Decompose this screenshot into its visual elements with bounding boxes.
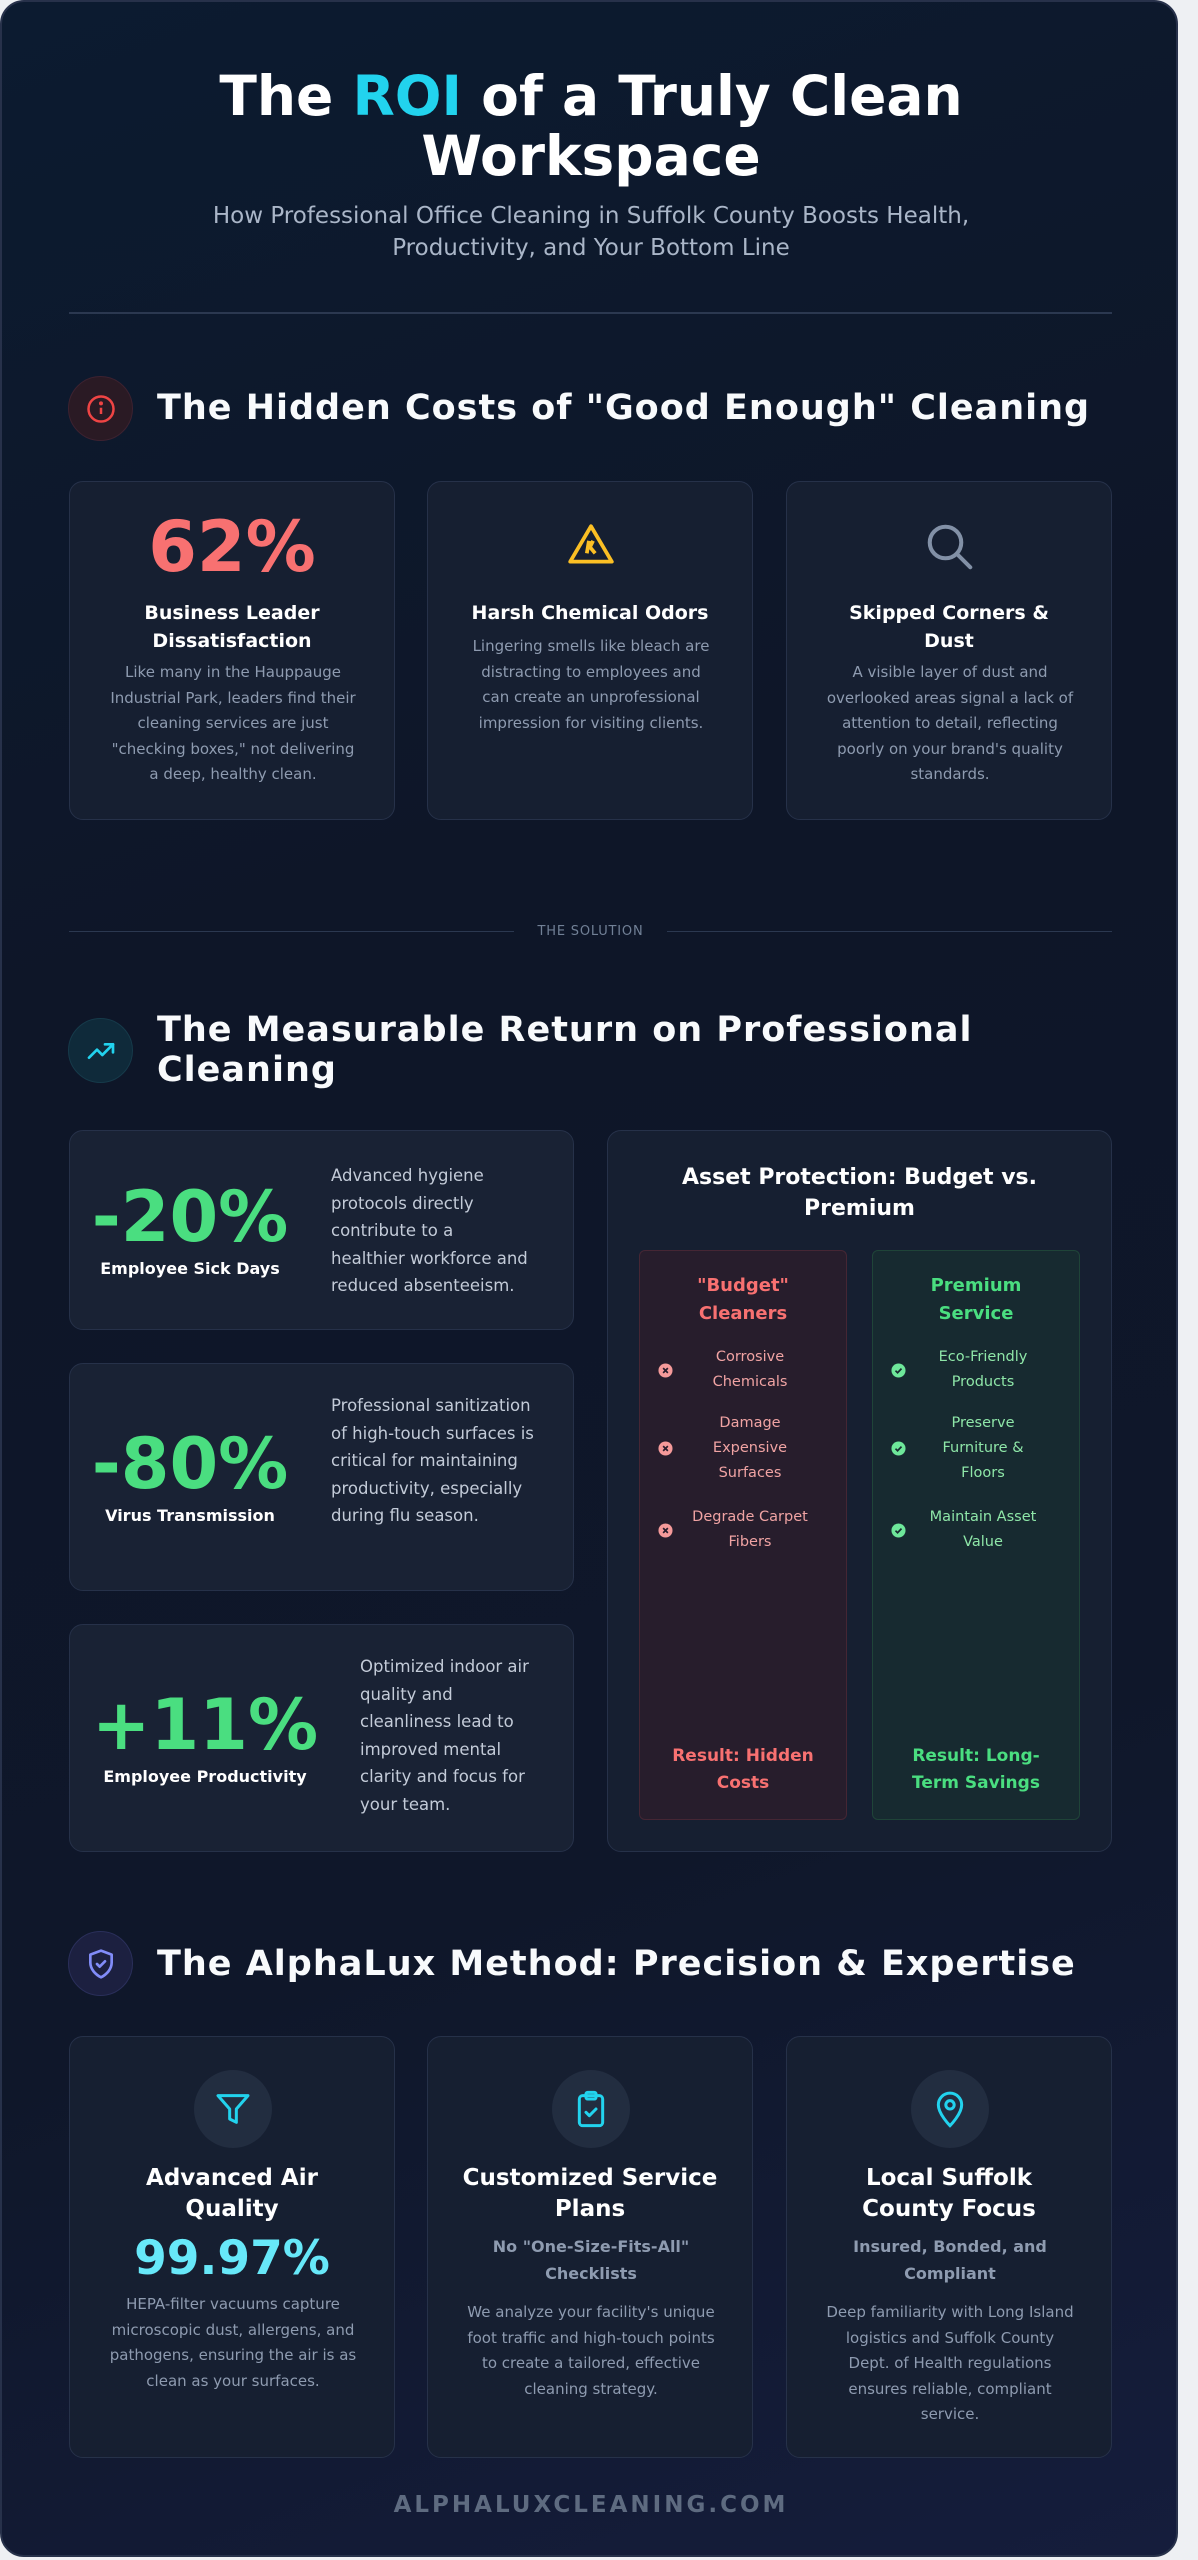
card title: Plans: [555, 2196, 625, 2222]
column title: "Budget": [697, 1275, 789, 1296]
stat -80%: Virus Transmission: [105, 1506, 275, 1525]
subtitle: Productivity, and Your Bottom Line: [392, 235, 790, 261]
stat +11%: Employee Productivity: [103, 1767, 307, 1786]
panel: virus: [69, 1363, 574, 1591]
card title: Business Leader: [144, 602, 320, 624]
subtitle: [213, 203, 969, 261]
title: The ROI of a Truly Clean: [219, 64, 963, 128]
column: budget: [639, 1250, 847, 1820]
card title: [862, 2165, 1036, 2222]
item: [892, 1349, 1027, 1390]
card title: Dissatisfaction: [152, 630, 312, 652]
card title: Local Suffolk: [866, 2165, 1032, 2191]
column title: Premium: [931, 1275, 1021, 1296]
subtitle: How Professional Office Cleaning in Suffolk County Boosts Health,: [213, 203, 969, 229]
subtitle: [493, 2237, 689, 2283]
result: Term Savings: [912, 1773, 1040, 1793]
column title: Cleaners: [699, 1303, 787, 1324]
heading: hidden costs: The Hidden Costs of "Good Enough" Cleaning: [157, 388, 1090, 428]
card text: Deep familiarity with Long Island logistics and Suffolk County Dept. of Health regulations ensures reliable, compliant service.: [826, 2303, 1074, 2423]
result: [672, 1746, 814, 1793]
card title: [849, 602, 1049, 652]
card title: Customized Service: [463, 2165, 717, 2191]
stat 62%: 62%: [148, 506, 316, 588]
result: Result: Hidden: [672, 1746, 814, 1766]
card text: Like many in the Hauppauge Industrial Park, leaders find their cleaning services are just "checking boxes," not delivering a deep, healthy clean.: [110, 663, 356, 783]
subtitle: Compliant: [904, 2264, 996, 2283]
subtitle: No "One-Size-Fits-All": [493, 2237, 689, 2256]
card title: Advanced Air: [146, 2165, 318, 2191]
item: [658, 1349, 787, 1390]
subtitle: [853, 2237, 1047, 2283]
result: Costs: [717, 1773, 769, 1793]
title: [219, 64, 963, 188]
title: Workspace: [421, 124, 761, 188]
panel: asset protection: [607, 1130, 1112, 1852]
panel: dust: [786, 481, 1112, 820]
item: [658, 1415, 787, 1481]
item: Degrade Carpet Fibers: [692, 1509, 808, 1550]
card text: A visible layer of dust and overlooked areas signal a lack of attention to detail, reflecting poorly on your brand's quality standards.: [827, 663, 1073, 783]
panel: service plans: [427, 2036, 753, 2458]
card text: We analyze your facility's unique foot traffic and high-touch points to create a tailored, effective cleaning strategy.: [467, 2303, 715, 2398]
result: [912, 1746, 1040, 1793]
stat -20%: Employee Sick Days: [100, 1259, 280, 1278]
heading: measurable return: The Measurable Return on Professional: [157, 1010, 973, 1050]
text: Optimized indoor air quality and cleanliness lead to improved mental clarity and focus for your team.: [360, 1657, 529, 1814]
stat +11%: +11%: [92, 1684, 318, 1766]
column title: [931, 1275, 1021, 1324]
item: Maintain Asset Value: [930, 1509, 1036, 1550]
icon: shield: [68, 1931, 133, 1996]
card title: [146, 2165, 318, 2222]
card title: Dust: [924, 630, 974, 652]
card text: Lingering smells like bleach are distracting to employees and can create an unprofessional impression for visiting clients.: [473, 637, 709, 732]
panel: productivity: [69, 1624, 574, 1852]
heading: measurable return: [157, 1010, 973, 1090]
result: Result: Long-: [912, 1746, 1040, 1766]
item: [892, 1415, 1024, 1481]
text: Professional sanitization of high-touch surfaces is critical for maintaining productivity, especially during flu season.: [331, 1396, 534, 1525]
item: Corrosive Chemicals: [713, 1349, 787, 1390]
stat -80%: -80%: [92, 1423, 288, 1505]
panel title: Asset Protection: Budget vs.: [682, 1165, 1037, 1190]
panel: local focus: [786, 2036, 1112, 2458]
icon: clipboard: [552, 2070, 630, 2148]
icon: warning: [568, 524, 614, 564]
stat -20%: -20%: [92, 1176, 288, 1258]
subtitle: Insured, Bonded, and: [853, 2237, 1047, 2256]
panel: odors: [427, 481, 753, 820]
text: Advanced hygiene protocols directly contribute to a healthier workforce and reduced absenteeism.: [331, 1166, 528, 1295]
item: Damage Expensive Surfaces: [713, 1415, 787, 1481]
column title: Service: [939, 1303, 1013, 1324]
footer: ALPHALUXCLEANING.COM: [394, 2492, 788, 2518]
icon: map pin: [911, 2070, 989, 2148]
heading: measurable return: Cleaning: [157, 1050, 337, 1090]
icon: filter: [194, 2070, 272, 2148]
divider: the solution: THE SOLUTION: [538, 924, 644, 939]
item: Eco-Friendly Products: [939, 1349, 1027, 1390]
item: Preserve Furniture & Floors: [942, 1415, 1024, 1481]
card title: Harsh Chemical Odors: [472, 602, 708, 624]
panel title: [682, 1165, 1037, 1221]
panel: air quality: [69, 2036, 395, 2458]
heading: alphalux method: The AlphaLux Method: Precision & Expertise: [157, 1944, 1076, 1984]
stat 99.97%: 99.97%: [134, 2231, 330, 2286]
card title: [463, 2165, 717, 2222]
panel: sick days: [69, 1130, 574, 1330]
panel title: Premium: [804, 1196, 915, 1221]
panel: 62%: [69, 481, 395, 820]
card text: HEPA-filter vacuums capture microscopic dust, allergens, and pathogens, ensuring the air is as clean as your surfaces.: [110, 2295, 356, 2390]
icon: trend: [68, 1018, 133, 1083]
icon: search: [928, 524, 972, 570]
card title: County Focus: [862, 2196, 1036, 2222]
card title: Skipped Corners &: [849, 602, 1049, 624]
card title: [144, 602, 320, 652]
column title: [697, 1275, 789, 1324]
subtitle: Checklists: [545, 2264, 637, 2283]
card title: Quality: [185, 2196, 279, 2222]
icon: info: [68, 376, 133, 441]
column: premium: [872, 1250, 1080, 1820]
